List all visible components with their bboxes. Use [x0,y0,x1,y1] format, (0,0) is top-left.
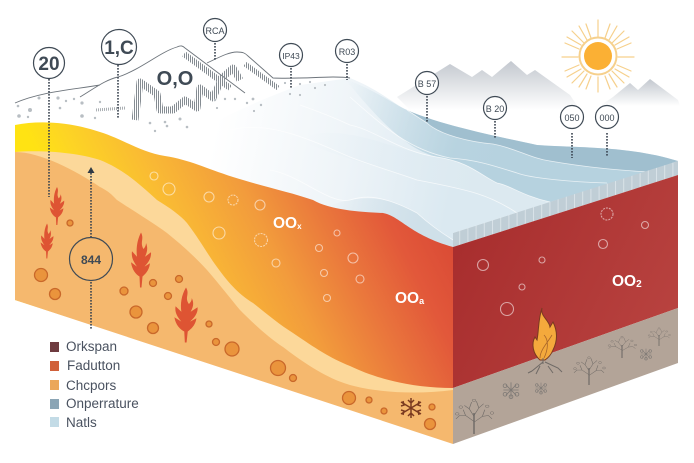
pale glacier band [310,133,550,213]
slab edge [453,161,678,247]
panel: gray ground [453,308,678,444]
label: OOx: x [297,222,302,231]
callout: B57 [416,72,438,123]
panel: right red face [453,175,678,388]
legend: Natls [66,415,97,430]
bubbles [150,172,648,316]
label: OOa: OO [395,290,419,307]
mountain outline and hatching [15,46,350,120]
label: O,O: O,O [157,68,193,90]
callout: R03: R03 [339,47,355,57]
trees [455,328,671,434]
lower glacier band [330,198,453,250]
icon: snowflake [401,398,421,418]
legend: Chcpors [66,378,117,393]
callout: 20 [34,48,64,197]
callout: 000: 000 [599,113,615,123]
callout: 050: 050 [564,113,580,123]
callout: B20 [484,96,506,139]
flow lines [230,97,647,240]
panel: left face upper gradient [15,122,453,392]
snow surface [160,78,678,250]
legend: Onperrature [66,396,139,411]
callout: R03 [336,40,358,80]
callout: 844 with arrow [70,167,112,330]
label: OOa: a [419,296,425,306]
label: OO2: 2 [636,279,642,290]
callout: RCA: RCA [205,26,225,36]
callout: 000 [596,106,618,157]
label: OO2: OO [612,273,636,290]
mid glacier band [345,79,647,202]
label: OOx: OO [273,215,297,232]
speckle dots [17,81,326,132]
legend: Fadutton [67,358,120,373]
callout: B57: B 57 [418,79,436,89]
callout: 1,C [102,30,136,118]
flames [41,187,198,342]
callout: IP43: IP43 [282,51,300,61]
callout: 050 [560,106,584,158]
legend [50,339,139,430]
orange circles [34,220,436,430]
background mountains [397,61,680,110]
callout: 1,C: 1,C [104,38,134,59]
callout: B20: B 20 [486,104,504,114]
callout: RCA [204,18,226,60]
callout: IP43 [280,44,302,88]
callout: 20: 20 [38,54,60,75]
callout: 844 with arrow: 844 [81,253,101,267]
icon: sun [562,20,634,92]
legend: Orkspan [66,339,117,354]
panel: lower orange layer [15,152,453,444]
light band [15,151,453,400]
icon: fire [528,308,562,374]
darkest glacier band [407,110,678,172]
